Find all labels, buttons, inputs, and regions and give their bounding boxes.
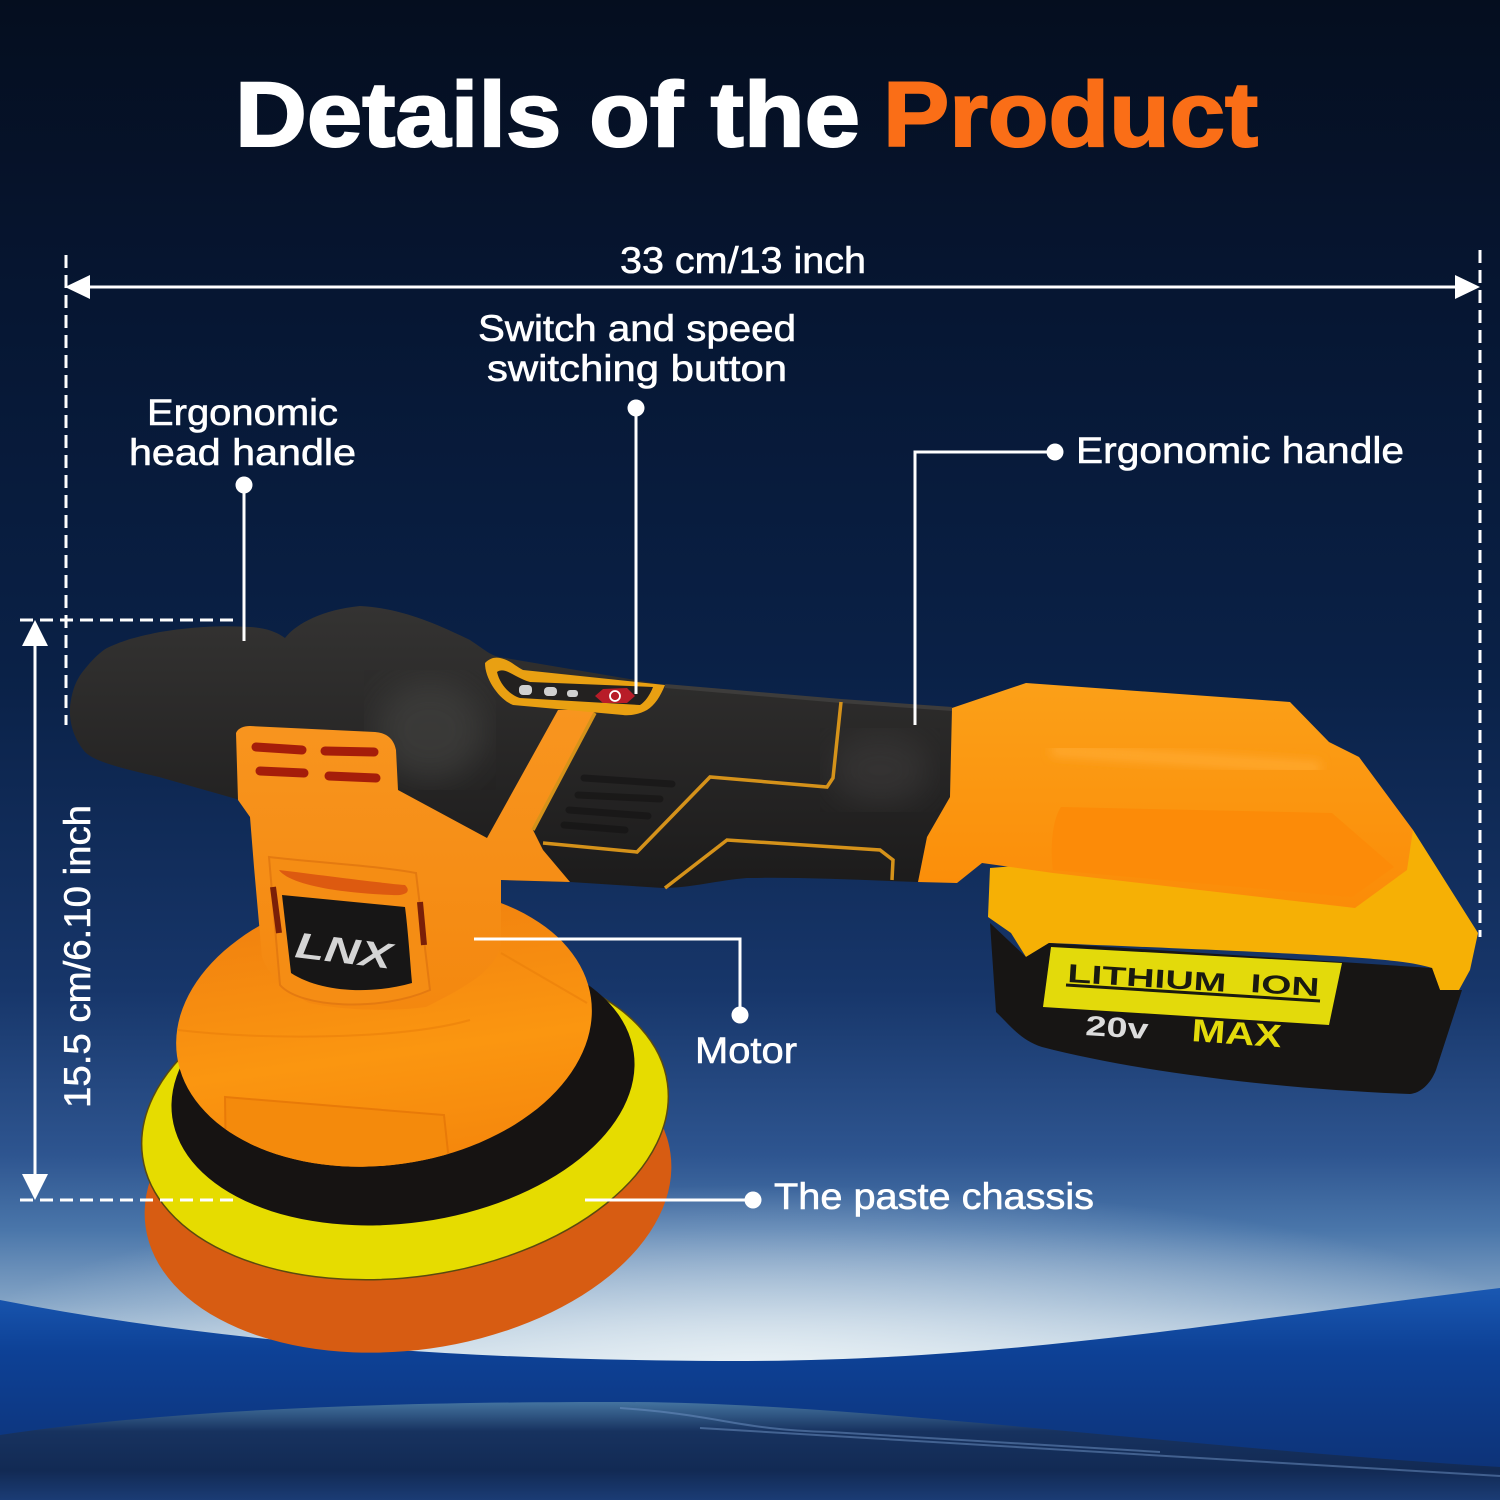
handle top strip bbox=[665, 686, 952, 709]
callout: ergonomic handle bbox=[915, 430, 1404, 725]
callout: ergonomic head handle: head handle bbox=[129, 432, 356, 473]
callout: ergonomic head handle: Ergonomic bbox=[147, 392, 338, 433]
orange body and neck bbox=[236, 710, 595, 1010]
foam pad bbox=[123, 995, 693, 1385]
battery label: LITHIUM bbox=[1067, 958, 1227, 998]
orange adapter cover bbox=[918, 683, 1413, 908]
handle grip ridges bbox=[564, 778, 672, 830]
logo recess bbox=[269, 857, 430, 1005]
adapter amber body bbox=[988, 830, 1478, 990]
callout: paste chassis bbox=[585, 1176, 1094, 1217]
cover raised block bbox=[1052, 807, 1394, 897]
title: Details of the bbox=[235, 64, 860, 166]
control panel bbox=[485, 658, 665, 715]
callout: motor: Motor bbox=[695, 1030, 797, 1071]
handle gold trim bbox=[533, 702, 893, 888]
dimension: width: 33 cm/13 inch bbox=[620, 240, 866, 281]
dimension: height: 15.5 cm/6.10 inch bbox=[57, 805, 98, 1108]
callout: switch button bbox=[478, 308, 796, 694]
battery pack bbox=[990, 923, 1462, 1094]
vent slots bbox=[256, 747, 376, 778]
black backing plate bbox=[153, 916, 653, 1254]
callout: ergonomic head handle bbox=[129, 392, 356, 641]
callout: paste chassis: The paste chassis bbox=[774, 1176, 1094, 1217]
callout: switch button: switching button bbox=[487, 348, 787, 389]
yellow pad bbox=[121, 928, 689, 1312]
title accent word: Product bbox=[883, 64, 1258, 166]
recess slot bbox=[279, 870, 408, 895]
callout: motor bbox=[474, 939, 797, 1071]
cover highlight bbox=[1052, 750, 1320, 768]
battery voltage: 20v bbox=[1085, 1010, 1150, 1045]
handle highlight bbox=[830, 735, 930, 805]
black handle and head bbox=[70, 606, 952, 888]
dimension: width bbox=[65, 240, 1480, 937]
battery label: ION bbox=[1250, 968, 1320, 1002]
head highlight bbox=[375, 680, 485, 780]
background waves bbox=[0, 1288, 1500, 1500]
dimension: height bbox=[20, 620, 236, 1200]
battery max: MAX bbox=[1191, 1012, 1284, 1054]
orange dome bbox=[158, 861, 610, 1193]
callout: ergonomic handle: Ergonomic handle bbox=[1076, 430, 1404, 471]
dome facet bbox=[178, 953, 587, 1037]
logo badge bbox=[282, 895, 412, 990]
logo badge: LNX bbox=[293, 924, 397, 977]
side slits bbox=[273, 887, 424, 945]
horizon glow bbox=[0, 1185, 1500, 1500]
callout: switch button: Switch and speed bbox=[478, 308, 796, 349]
dome arrow recess bbox=[224, 1096, 450, 1167]
product: cordless polisher bbox=[70, 606, 1478, 1385]
battery label bbox=[1043, 947, 1342, 1025]
power button bbox=[595, 688, 635, 703]
